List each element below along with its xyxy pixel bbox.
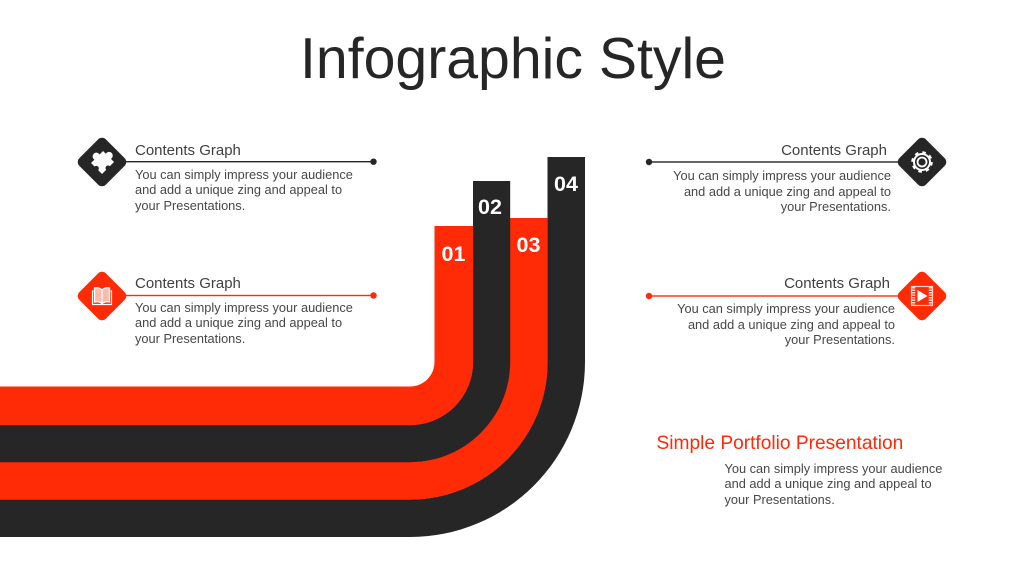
bar 02 [0, 181, 510, 462]
bar 04: 04 [554, 172, 578, 196]
panel: portfolio callout [656, 433, 942, 507]
callout body text: You can simply impress your audience [724, 461, 942, 476]
body text: your Presentations. [135, 198, 245, 213]
title: Infographic Style [300, 26, 726, 90]
connector line with dot [126, 158, 377, 165]
body text: your Presentations. [781, 199, 891, 214]
panel: right item 1 [646, 138, 946, 214]
connector line with dot [646, 158, 898, 166]
body text [135, 167, 353, 213]
icon: open book [78, 272, 126, 320]
panel: right item 2 [646, 272, 946, 347]
body text: and add a unique zing and appeal to [684, 184, 891, 199]
icon: gear [898, 138, 946, 186]
bar 02: 02 [478, 195, 502, 219]
body text: You can simply impress your audience [135, 300, 353, 315]
body text: your Presentations. [785, 332, 895, 347]
panel: left item 1 [78, 138, 377, 213]
bar 03 [0, 218, 548, 500]
heading: Contents Graph [784, 275, 890, 292]
bar 01 [0, 226, 473, 425]
body text: and add a unique zing and appeal to [135, 182, 342, 197]
body text: You can simply impress your audience [677, 301, 895, 316]
callout body text: and add a unique zing and appeal to [724, 476, 932, 491]
connector line with dot [126, 292, 377, 299]
heading: Contents Graph [781, 142, 887, 159]
body text: You can simply impress your audience [135, 167, 353, 182]
heading: Contents Graph [135, 142, 241, 159]
body text: and add a unique zing and appeal to [135, 315, 342, 330]
body text [673, 168, 891, 214]
body text: You can simply impress your audience [673, 168, 891, 183]
panel: left item 2 [78, 272, 377, 346]
bar 03: 03 [517, 233, 540, 257]
body text: your Presentations. [135, 331, 245, 346]
heading: Contents Graph [135, 275, 241, 292]
body text [135, 300, 353, 346]
bar 01: 01 [442, 242, 465, 266]
body text: and add a unique zing and appeal to [688, 317, 895, 332]
callout body text [724, 461, 942, 507]
callout body text: your Presentations. [724, 492, 835, 507]
connector line with dot [646, 292, 898, 300]
icon: puzzle piece [78, 138, 126, 186]
body text [677, 301, 895, 347]
icon: film play [898, 272, 946, 320]
callout heading: Simple Portfolio Presentation [656, 433, 903, 454]
